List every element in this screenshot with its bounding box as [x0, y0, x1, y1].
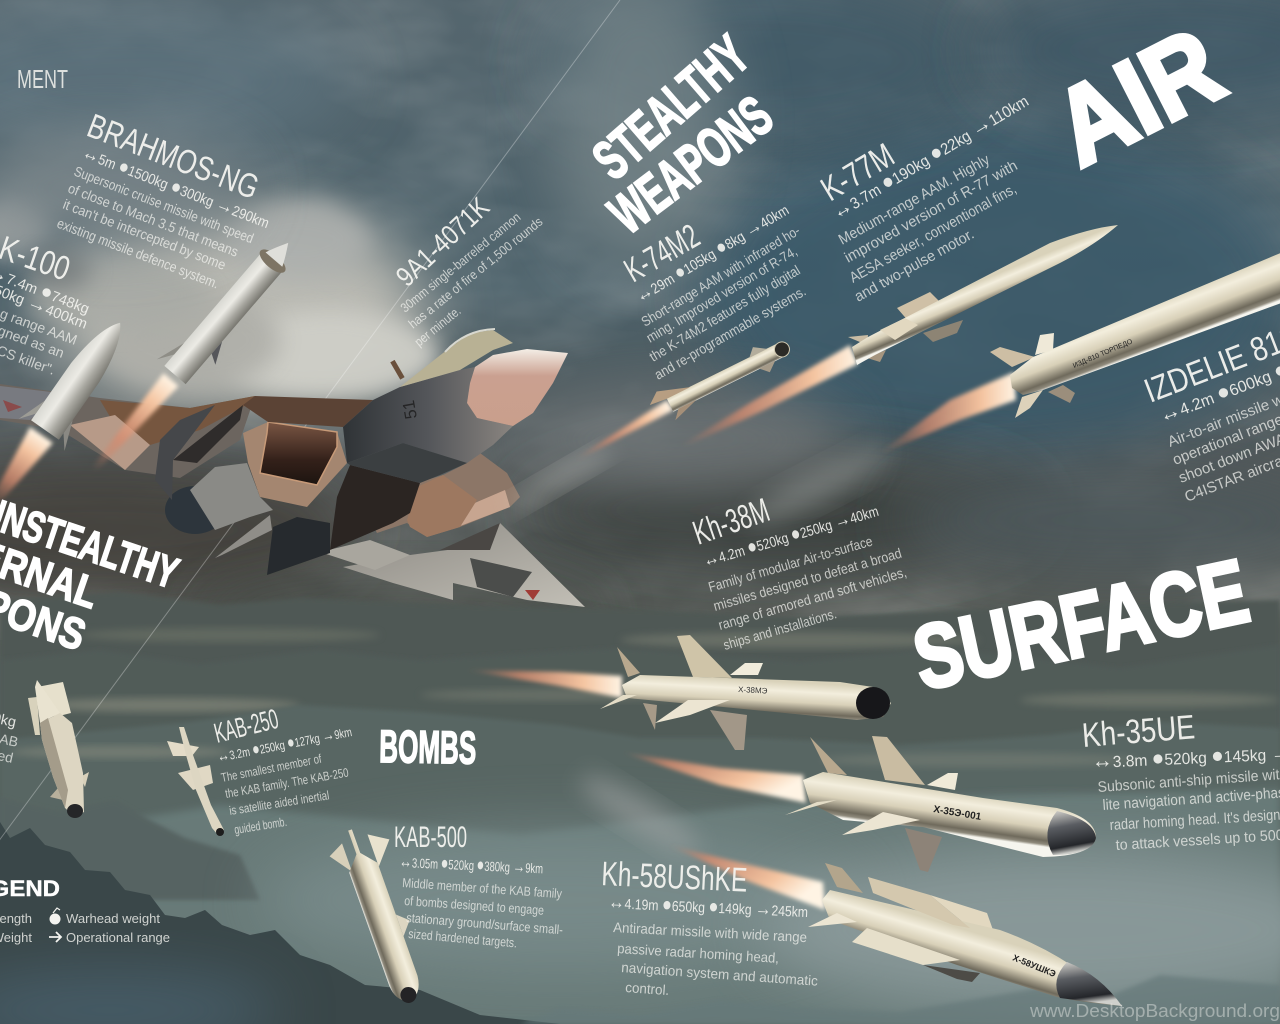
missile: Kh-58UShKE: [572, 764, 1122, 1006]
text block: KAB-500: of bombs designed to engage: [404, 893, 544, 918]
text block: Kh-35UE: Kh-35UE: [1081, 708, 1196, 755]
text block: BrahMos-NG: of close to Mach 3.5 that means: [66, 180, 241, 260]
missile: Kh-58UShKE: X-58УШКЭ: [1011, 953, 1058, 979]
clouds behind the jet: [0, 130, 440, 410]
text block: Kh-58UShKE: control.: [625, 979, 670, 998]
text block: 9A1-4071K: 30mm single-barreled cannon: [397, 209, 523, 315]
heading: stealthy weapons: WEAPONS: [597, 83, 784, 246]
bomb: KAB-500: [324, 819, 443, 1012]
text block: K-77M: K-77M: [815, 136, 901, 209]
text block: Kh-58UShKE: [601, 855, 818, 998]
mountain layers: [0, 592, 1280, 1024]
dark foothills: [0, 797, 260, 900]
text block: Kh-38M: Kh-38M: [688, 491, 774, 553]
text block: Kh-38M: ↔4.2m ●520kg ●250kg →40km: [700, 499, 881, 572]
text block: K-74M2: ↔29m ●105kg ●8kg →40km: [631, 198, 793, 307]
text block: Kh-58UShKE: ↔4.19m ●650kg ●149kg →245km: [608, 891, 809, 922]
red star: [3, 400, 22, 412]
text block: K-77M: improved version of R-77 with: [842, 157, 1020, 266]
forest ridge: [0, 822, 560, 1024]
missile: K-100: [0, 307, 143, 512]
text block: KAB-500: sized hardened targets.: [408, 926, 518, 950]
text block: K-77M: and two-pulse motor.: [852, 226, 977, 305]
heading: stealthy weapons: [581, 23, 784, 246]
text block: BrahMos-NG: [55, 107, 273, 291]
text block: 9A1-4071K: [390, 191, 546, 349]
text block: Kh-35UE: [1081, 708, 1280, 854]
weapons bay left: [267, 517, 330, 575]
heading: unstealthy external weapons: [0, 487, 184, 660]
text block: KAB-250: the KAB family. The KAB-250: [224, 765, 350, 801]
missile: K-77M: [680, 225, 1118, 446]
missile: Kh-35UE: [621, 736, 1096, 872]
probe: [390, 360, 405, 380]
bomb: left large: [28, 680, 89, 818]
text block: K-74M2: and re-programmable systems.: [652, 283, 808, 383]
heading: air: AIR: [1036, 4, 1240, 188]
fighter jet: [0, 329, 585, 607]
cockpit spine: [400, 330, 513, 387]
text block: BrahMos-NG: ↔5m ●1500kg ●300kg →290km: [79, 141, 273, 233]
text block: Kh-58UShKE: Antiradar missile with wide range: [613, 919, 808, 945]
legend: warhead weight: Warhead weight: [66, 911, 160, 926]
text block: Kh-38M: ships and installations.: [721, 605, 838, 653]
text block: BrahMos-NG: it can't be intercepted by some: [61, 196, 228, 273]
dark engine nozzle: [165, 486, 225, 534]
wing root: [243, 396, 373, 427]
text block: KAB-500: stationary ground/surface small-: [406, 910, 563, 937]
text block: KAB-250: ↔3.2m ●250kg ●127kg →9km: [215, 721, 353, 766]
text block: K-100: [0, 229, 93, 378]
missile: Kh-38M: Х-38МЭ: [738, 685, 768, 696]
text block: Kh-38M: Family of modular Air-to-surface: [706, 533, 874, 595]
missile: BrahMos-NG: [86, 227, 306, 476]
text block: K-74M2: K-74M2: [618, 217, 706, 290]
text block: KAB-500: Middle member of the KAB family: [402, 875, 563, 901]
left engine: [190, 463, 273, 530]
text block: KAB-250: [211, 703, 353, 837]
text block: 9A1-4071K: has a rate of fire of 1,500 rounds: [405, 214, 546, 331]
text block: Kh-38M: missiles designed to defeat a broad: [711, 545, 903, 614]
text block: 9A1-4071K: 9A1-4071K: [390, 191, 495, 292]
diagonal divider line: [0, 0, 620, 842]
text block: Kh-58UShKE: Kh-58UShKE: [601, 855, 748, 900]
text block: KAB-500: KAB-500: [394, 821, 467, 854]
bomb: KAB-250: [167, 727, 224, 836]
text block: K-74M2: Short-range AAM with infrared ho-: [638, 222, 803, 330]
missile: Kh-38M: [465, 635, 891, 750]
legend: [0, 876, 170, 945]
text block: 9A1-4071K: per minute.: [411, 303, 464, 349]
text block: KAB-500: [394, 821, 563, 950]
text block: BrahMos-NG: Supersonic cruise missile with speed: [72, 163, 256, 246]
legend: operational range: Operational range: [66, 930, 170, 945]
text block: K-77M: ↔3.7m ●190kg ●22kg →110km: [827, 87, 1032, 224]
lower left wing: [215, 515, 272, 558]
fuselage side: [343, 367, 513, 463]
missile: K-74M2: [504, 330, 796, 516]
text block: K-74M2: ming. Improved version of R-74,: [643, 243, 800, 346]
heading: bombs: BOMBS: [379, 720, 477, 774]
text block: Kh-58UShKE: navigation system and automatic: [621, 959, 818, 989]
right air intake: [407, 475, 477, 537]
left wing: [0, 384, 255, 478]
weapons bay centre: [330, 465, 420, 550]
text block: KAB-500: ↔3.05m ●520kg ●380kg →9km: [399, 851, 544, 877]
icon: warhead: [50, 908, 60, 924]
text block: KAB-250: is satellite aided inertial: [228, 788, 330, 818]
missile: Izdelie 810: [741, 249, 1280, 536]
section label: armament: MENT: [17, 64, 68, 94]
left wing weapons bay: [173, 405, 243, 463]
text block: left bomb: [0, 700, 20, 766]
text block: K-77M: Medium-range AAM. Highly: [836, 151, 993, 248]
text block: K-77M: [815, 87, 1032, 305]
central underbody: [360, 453, 520, 537]
text block: Kh-58UShKE: passive radar homing head,: [617, 940, 779, 966]
text block: BrahMos-NG: BRAHMOS-NG: [82, 107, 264, 207]
nose cone: [467, 349, 568, 426]
text block: KAB-250: KAB-250: [211, 703, 282, 749]
lower right wing: [343, 523, 585, 607]
text block: KAB-250: guided bomb.: [233, 815, 288, 837]
left intake surround: [243, 422, 347, 507]
text block: K-74M2: the K-74M2 features fully digital: [646, 262, 803, 365]
missile: Izdelie 810: ИЗД-810 ТОРПЕДО: [1072, 338, 1134, 370]
tail number: 51: [399, 399, 421, 421]
text block: Kh-38M: range of armored and soft vehicles,: [716, 564, 908, 633]
text block: Kh-38M: [688, 491, 908, 653]
text block: KAB-250: The smallest member of: [220, 752, 323, 785]
text block: BrahMos-NG: existing missile defence system.: [55, 215, 221, 291]
left intake opening: [260, 422, 337, 485]
text block: Izdelie 810: [1139, 318, 1280, 506]
icon: range arrow: [49, 932, 61, 942]
watermark: www.DesktopBackground.org: [1029, 1001, 1280, 1021]
missile: Kh-35UE: X-35Э-001: [933, 804, 982, 823]
distant treeline: [520, 975, 1280, 1024]
text block: K-74M2: [618, 198, 808, 383]
text block: K-77M: AESA seeker, conventional fins,: [847, 180, 1019, 286]
